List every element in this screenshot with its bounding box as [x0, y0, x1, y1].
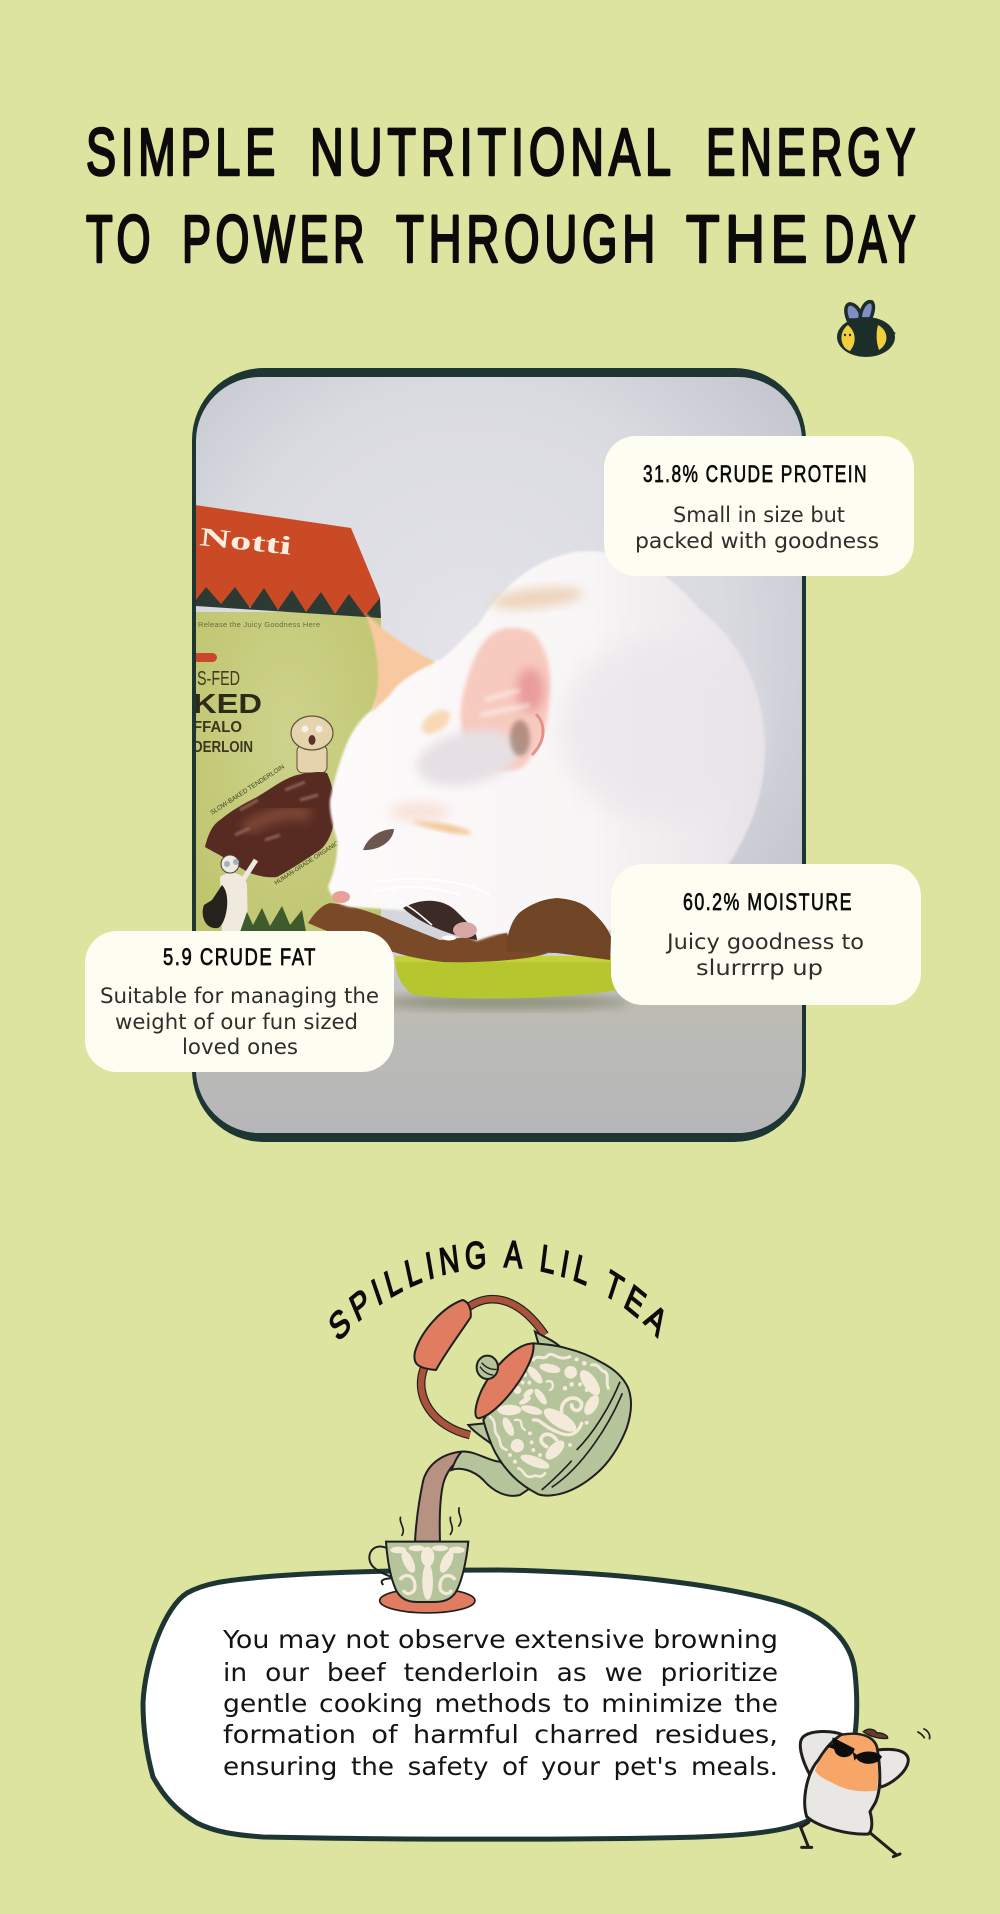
teapot pattern	[497, 1357, 604, 1472]
cat left ear	[365, 613, 436, 712]
cup pattern	[390, 1545, 465, 1600]
photo: product box: Notti	[198, 522, 293, 561]
heading: spilling a lil tea: SPILLING A LIL TEA	[330, 1240, 664, 1340]
tea stream	[415, 1452, 462, 1542]
cat whiskers	[406, 905, 432, 926]
panel: cat photo	[190, 365, 810, 1145]
cat mouth	[403, 901, 477, 940]
mascot orange head	[815, 1735, 878, 1791]
cup	[386, 1542, 468, 1602]
cat head shading	[416, 727, 520, 787]
teapot mounts	[468, 1332, 560, 1447]
title: SIMPLE	[86, 115, 280, 190]
teapot handle	[414, 1299, 545, 1435]
cat right ear	[461, 628, 550, 771]
callout: moisture	[611, 864, 921, 1005]
title: POWER	[182, 202, 369, 277]
photo: cat body	[328, 551, 765, 941]
mascot: bird with sunglasses	[800, 1729, 930, 1857]
title: NUTRITIONAL	[310, 115, 676, 190]
body text	[222, 1625, 778, 1781]
box art: cat	[203, 855, 256, 932]
mascot legs	[801, 1823, 900, 1857]
photo: product box: SLOW-BAKED TENDERLOIN	[209, 763, 286, 817]
callout: crude protein	[604, 436, 914, 576]
photo: product box	[193, 505, 381, 960]
icon: bee	[837, 302, 896, 357]
body text: You may not observe extensive browning	[222, 1625, 778, 1654]
photo: product box: HUMAN-GRADE ORGANIC	[274, 840, 341, 887]
title	[86, 115, 920, 277]
cat nose	[332, 891, 350, 903]
callout: crude fat: loved ones	[182, 1035, 298, 1059]
teapot spout	[452, 1451, 530, 1496]
photo wall and table	[190, 365, 810, 1145]
photo: product box: S-FED	[197, 668, 240, 690]
callout: crude fat	[85, 931, 394, 1072]
box art: dog	[291, 716, 333, 773]
teapot lid	[475, 1343, 534, 1418]
body text: formation of harmful charred residues,	[223, 1720, 778, 1749]
body text: in our beef tenderloin as we prioritize	[223, 1658, 778, 1687]
callout: crude protein: packed with goodness	[635, 529, 879, 553]
callout: moisture: Juicy goodness to	[665, 930, 864, 954]
cat facial tints	[420, 708, 452, 736]
photo: food left	[308, 903, 548, 962]
callout: crude protein: Small in size but	[673, 503, 845, 527]
motion marks	[917, 1729, 930, 1739]
body text: ensuring the safety of your pet's meals.	[223, 1752, 778, 1781]
title: DAY	[824, 202, 920, 277]
callout: crude protein: 31.8% CRUDE PROTEIN	[643, 461, 868, 488]
title: THROUGH	[396, 202, 660, 277]
photo: product box: Release the Juicy Goodness Here	[198, 620, 320, 629]
title: THE	[686, 202, 813, 277]
photo: product box: FFALO	[193, 719, 242, 736]
speech panel	[143, 1570, 857, 1839]
photo: product box: DERLOIN	[193, 739, 253, 756]
mascot sunglasses	[827, 1737, 882, 1764]
box art: meat	[205, 772, 335, 877]
callout: crude fat: Suitable for managing the	[100, 984, 379, 1008]
cup handle	[369, 1547, 395, 1585]
mascot arms	[800, 1731, 908, 1787]
title: TO	[86, 202, 155, 277]
callout: moisture: 60.2% MOISTURE	[683, 889, 853, 916]
photo: product box: KED	[193, 688, 262, 719]
cat eye	[363, 829, 394, 850]
photo: plate	[380, 956, 640, 1009]
body text: gentle cooking methods to minimize the	[223, 1689, 778, 1718]
teapot body	[483, 1343, 631, 1496]
illustration: teapot and cup	[369, 1299, 631, 1613]
photo: food right	[507, 898, 611, 960]
teapot knob	[477, 1356, 498, 1379]
mascot body	[805, 1734, 880, 1834]
box art: grass	[240, 906, 306, 932]
mascot hair	[863, 1729, 888, 1739]
callout: crude fat: weight of our fun sized	[115, 1010, 358, 1034]
steam	[400, 1507, 461, 1536]
callout: moisture: slurrrrp up	[696, 956, 823, 980]
saucer	[380, 1588, 475, 1613]
callout: crude fat: 5.9 CRUDE FAT	[163, 944, 317, 971]
